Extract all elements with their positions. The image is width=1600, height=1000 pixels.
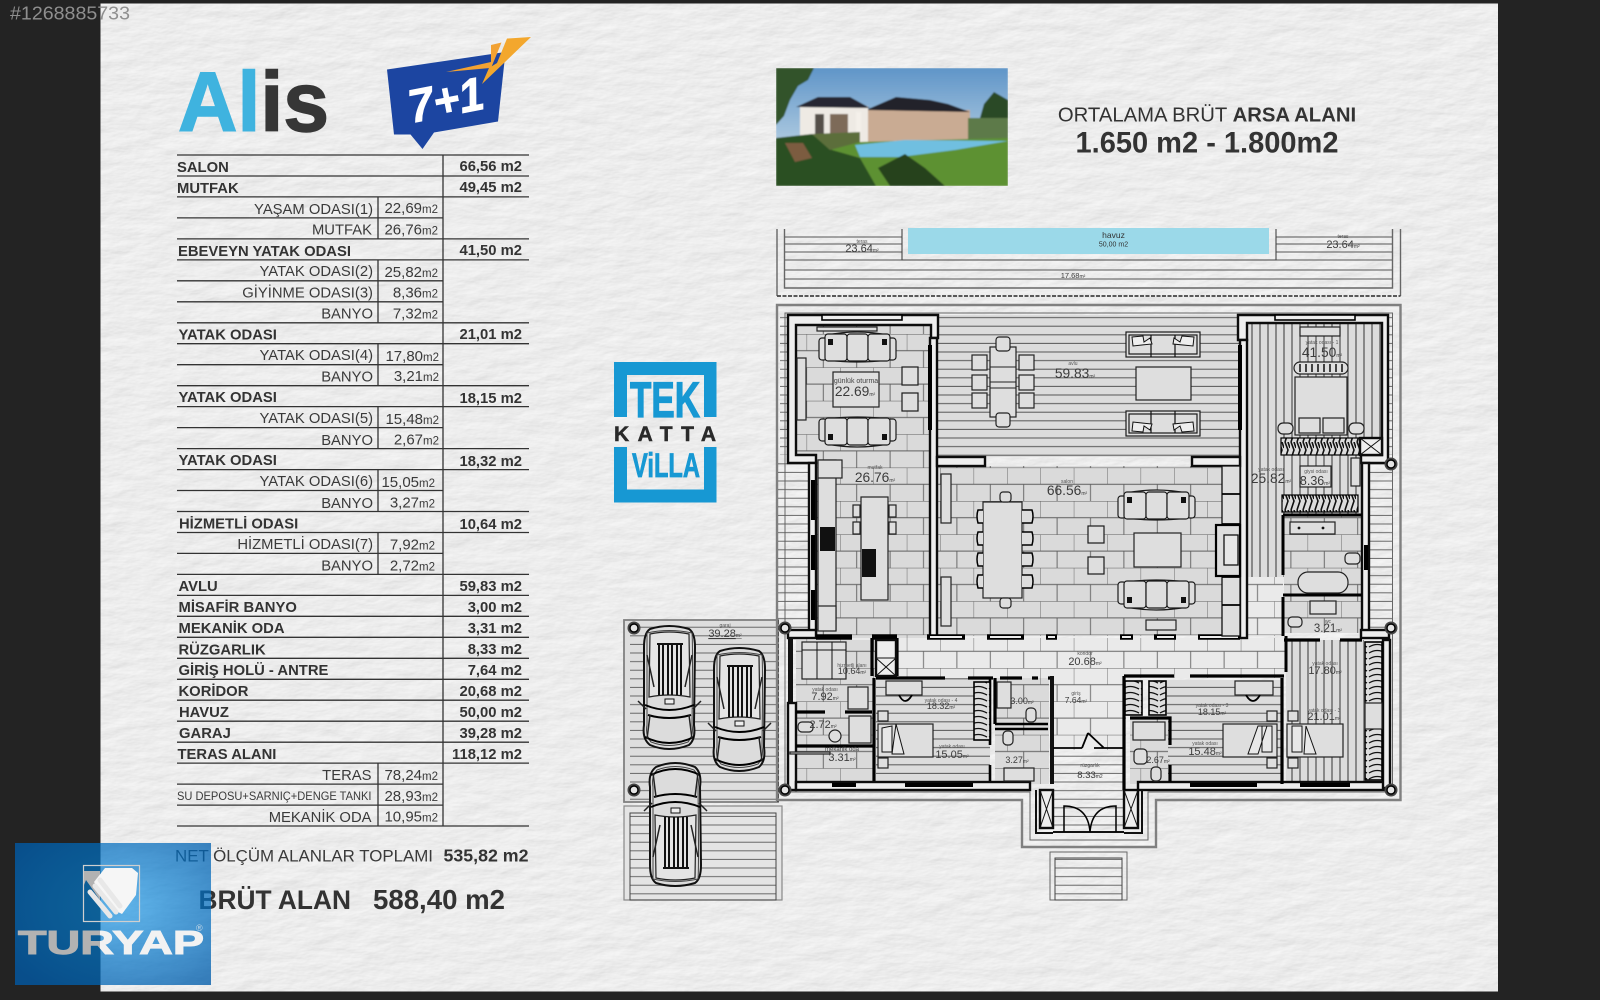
- label: pool: 50,00 m2: [1099, 242, 1128, 249]
- label: bedroom 18.32: 18.32m²: [927, 701, 956, 711]
- label: terrace right: 23.64m²: [1326, 239, 1360, 251]
- label: garage: 39.28m²: [708, 628, 742, 640]
- panel: master suite furniture: [1278, 327, 1382, 627]
- label: family room: [834, 378, 878, 399]
- wall: entry boxes: [1040, 790, 1053, 828]
- label: service bedroom: 7.92m²: [811, 691, 839, 703]
- row: banyo 2,67: [321, 432, 439, 449]
- wall: entry boxes right: [1124, 790, 1138, 828]
- label: service room: hizmetli alanı: [837, 663, 867, 669]
- label: service bedroom: yatak odası: [812, 687, 838, 693]
- row: avlu: AVLU: [178, 579, 218, 595]
- row: su deposu: [177, 788, 438, 805]
- label: service room: 10.64m²: [838, 666, 867, 676]
- row: mutfak: [177, 180, 522, 197]
- row: salon: 66,56 m2: [459, 159, 522, 175]
- row: mutfak sub: 26,76m2: [384, 222, 438, 238]
- floor plan: [624, 228, 1400, 900]
- registered mark: ®: [196, 923, 203, 933]
- icon: column bottom left: [778, 784, 792, 796]
- floor: guest bath: [995, 678, 1049, 784]
- row: salon: SALON: [177, 160, 229, 176]
- table grid lines: [177, 155, 529, 826]
- label: bath 2.67: 2.67m²: [1146, 755, 1170, 765]
- badge: 7+1 speech bubble: 7+1: [404, 66, 488, 133]
- panel: courtyard furniture: [972, 332, 1200, 436]
- label: garage: garaj: [719, 623, 731, 629]
- row: misafir banyo: MİSAFİR BANYO: [178, 599, 297, 616]
- label: bedroom 18.32: [925, 698, 958, 711]
- panel: right bedrooms furniture: [1125, 642, 1382, 781]
- icon: column bottom right: [1384, 784, 1398, 796]
- row: yatak odası 4: 17,80m2: [385, 348, 439, 365]
- label: garage: [708, 623, 742, 640]
- row: banyo 7,32: [321, 306, 438, 322]
- row: rüzgarlık: 8,33 m2: [468, 642, 522, 658]
- panel: floors: [796, 315, 1382, 832]
- row: yatak odası 18,32: 18,32 m2: [459, 454, 522, 470]
- panel: outer terrace border: [777, 305, 1400, 847]
- row: giyinme odası: 8,36m2: [393, 284, 438, 302]
- panel: rear terrace and pool: [777, 228, 1400, 296]
- floor: family room: [796, 325, 932, 458]
- label: guest bath: 3.00m²: [1010, 696, 1034, 706]
- row: banyo 2,67: 2,67m2: [394, 432, 439, 448]
- label: living room: salon: [1061, 479, 1073, 485]
- wall: lower service partitions: [796, 638, 1053, 784]
- row: garaj: [179, 726, 522, 742]
- label: bedroom 21.01: 21.01m²: [1307, 711, 1341, 723]
- wall: mech closet: [876, 640, 896, 676]
- row: yaşam odası: YAŞAM ODASI(1): [254, 202, 373, 218]
- logo: Tek Katta Villa: ViLLA: [632, 447, 700, 485]
- panel: front steps: [1050, 852, 1127, 900]
- row: teras alanı: [178, 747, 522, 763]
- row: garaj: 39,28 m2: [459, 726, 522, 742]
- row: yatak odası 2: [260, 264, 438, 281]
- logo: Tek Katta Villa: KATTA: [614, 423, 716, 446]
- row: banyo 7,32: 7,32m2: [393, 306, 438, 322]
- label: terrace left: teras: [856, 239, 868, 245]
- label: bedroom 15.48: yatak odası: [1192, 741, 1218, 747]
- row: rüzgarlık: [178, 642, 522, 658]
- label: wc 3.21: 3.21m²: [1314, 623, 1342, 635]
- row: hizmetli odası 7: HİZMETLİ ODASI(7): [237, 535, 373, 553]
- label: kitchen: 26.76m²: [855, 470, 896, 485]
- label: terrace right: [1326, 234, 1360, 251]
- row: yatak odası 18,15: YATAK ODASI: [178, 390, 277, 406]
- panel: garage: [624, 620, 782, 900]
- heading: average plot area: ORTALAMA BRÜT ARSA ALANI: [1058, 104, 1356, 126]
- row: banyo 3,21: BANYO: [321, 370, 373, 386]
- label: terrace right: teras: [1337, 234, 1349, 240]
- label: windbreak: 8.33m2: [1077, 770, 1103, 781]
- totals: gross area: 588,40 m2: [373, 884, 505, 915]
- label: bedroom 15.05: 15.05m²: [935, 749, 969, 761]
- listing id watermark: #1268885733: [10, 2, 130, 24]
- wall: right block: [1124, 640, 1362, 790]
- floor: bath right: [1130, 718, 1168, 784]
- row: hizmetli odası: HİZMETLİ ODASI: [179, 516, 298, 532]
- label: courtyard: 59.83m²: [1055, 366, 1096, 381]
- row: koridor: KORİDOR: [178, 683, 249, 700]
- row: hizmetli odası: [179, 516, 522, 533]
- label: bedroom 18.15: [1196, 703, 1229, 717]
- label: corridor: 20.68m²: [1068, 656, 1102, 668]
- floor: bedroom far right: [1286, 640, 1364, 784]
- pool: [908, 228, 1269, 254]
- row: yatak odası 5: YATAK ODASI(5): [260, 411, 373, 427]
- row: banyo 2,72: BANYO: [321, 558, 373, 574]
- wall: master room shell: [1238, 315, 1388, 463]
- row: ebeveyn yatak odası: EBEVEYN YATAK ODASI: [178, 244, 351, 260]
- row: yatak odası 21,01: 21,01 m2: [459, 327, 522, 343]
- panel: room labels: [809, 340, 1343, 781]
- floor: entrance hall: [1050, 678, 1126, 750]
- row: yatak odası 4: [260, 348, 439, 365]
- floor: living room: [937, 466, 1240, 636]
- label: mechanical room: 3.31m²: [828, 752, 856, 764]
- row: yatak odası 5: 15,48m2: [385, 411, 439, 428]
- row: banyo 2,72: [321, 558, 435, 574]
- row: mekanik oda: MEKANİK ODA: [178, 620, 285, 637]
- row: mutfak: 49,45 m2: [459, 180, 522, 196]
- label: courtyard: avlu: [1068, 361, 1078, 367]
- label: master bedroom corridor: 25.82m²: [1251, 471, 1292, 486]
- row: teras: TERAS: [322, 768, 372, 784]
- totals: net area: [175, 846, 529, 866]
- row: rüzgarlık: RÜZGARLIK: [178, 642, 266, 658]
- label: pool: havuz: [1102, 230, 1125, 240]
- row: mekanik oda sub: [269, 808, 438, 826]
- label: bedroom 15.48: 15.48m²: [1188, 746, 1222, 758]
- floor: master bedroom: [1247, 323, 1382, 455]
- row: avlu: [178, 579, 522, 595]
- row: ebeveyn yatak odası: 41,50 m2: [459, 243, 522, 259]
- label: corridor: koridor: [1077, 651, 1093, 657]
- icon: garage column lower: [628, 784, 640, 796]
- wall: left service: [788, 638, 793, 703]
- row: mekanik oda sub: 10,95m2: [384, 808, 438, 826]
- row: hizmetli odası: 10,64 m2: [459, 517, 522, 533]
- icon: handshake: [84, 866, 140, 922]
- label: terrace left: 23.64m²: [845, 243, 879, 255]
- floor: service room: [796, 640, 874, 786]
- wall: master interior: [1240, 340, 1247, 638]
- row: yatak odası 6: YATAK ODASI(6): [260, 474, 373, 490]
- row: yatak odası 6: 15,05m2: [381, 474, 435, 491]
- logo: Tek Katta Villa: [614, 362, 716, 502]
- heading: average plot area: [1058, 104, 1356, 160]
- title: Alis: Alis: [178, 55, 329, 149]
- row: mutfak sub: MUTFAK: [312, 222, 372, 238]
- label: family room: günlük oturma: [834, 378, 878, 385]
- row: teras alanı: TERAS ALANI: [178, 747, 276, 763]
- row: giyinme odası: [242, 284, 438, 302]
- label: mechanical room: [825, 747, 860, 764]
- label: dressing room: 8.36m²: [1300, 474, 1330, 488]
- label: bedroom 18.32: yatak odası - 4: [925, 698, 958, 704]
- row: teras alanı: 118,12 m2: [452, 747, 522, 763]
- totals: gross area: BRÜT ALAN: [198, 885, 351, 915]
- row: banyo 2,67: BANYO: [321, 433, 373, 449]
- label: bedroom 15.05: yatak odası: [939, 744, 965, 750]
- row: ebeveyn yatak odası: [178, 243, 522, 260]
- row: yatak odası 2: 25,82m2: [384, 264, 438, 281]
- icon: column upper right: [1384, 458, 1398, 470]
- row: giriş holü: 7,64 m2: [468, 663, 522, 679]
- label: entrance hall: 7.64m²: [1065, 695, 1088, 705]
- row: yatak odası 18,15: [178, 390, 522, 407]
- row: yatak odası 6: [260, 474, 435, 491]
- label: bedroom 18.15: 18.15m²: [1198, 707, 1227, 717]
- row: banyo 3,21: [321, 368, 439, 386]
- row: misafir banyo: [178, 599, 522, 616]
- row: koridor: 20,68 m2: [459, 684, 522, 700]
- window: master: [1275, 315, 1355, 320]
- floor: hall beside master: [1247, 577, 1283, 636]
- label: service bath: 2.72m²: [809, 719, 837, 731]
- label: dressing room: giysi odası: [1304, 469, 1328, 475]
- label: living room: 66.56m²: [1047, 483, 1088, 498]
- row: salon: [177, 159, 522, 176]
- floor: courtyard: [937, 315, 1240, 457]
- label: mechanical room: mekanik oda: [825, 747, 860, 753]
- icon: car 2: [708, 648, 771, 771]
- row: yatak odası 5: [260, 411, 439, 428]
- label: terrace middle: 17.68m²: [1061, 271, 1086, 280]
- floor: corridor: [796, 638, 1288, 678]
- label: bedroom 18.15: yatak odası - 3: [1196, 703, 1229, 709]
- panel: left bedroom furniture: [878, 681, 1036, 781]
- wall: bottom façade: [796, 782, 1030, 790]
- row: banyo 3,21: 3,21m2: [394, 368, 439, 385]
- label: bedroom 15.05: [935, 744, 969, 761]
- row: koridor: [178, 683, 522, 700]
- icon: entrance doors and swing door: [1053, 733, 1124, 832]
- row: mekanik oda: 3,31 m2: [468, 621, 522, 637]
- wall: central: [930, 338, 937, 638]
- row: mutfak: MUTFAK: [177, 181, 239, 197]
- floor: dressing and master corridor: [1247, 455, 1362, 577]
- row: banyo 2,72: 2,72m2: [390, 558, 435, 574]
- label: bedroom 17.80: 17.80m²: [1308, 665, 1342, 677]
- row: giyinme odası: GİYİNME ODASI(3): [242, 284, 373, 302]
- row: yaşam odası: [254, 200, 438, 218]
- label: windbreak: [1077, 763, 1103, 781]
- row: teras: [322, 767, 438, 784]
- panel: kitchen furniture: [818, 460, 896, 631]
- row: yatak odası 18,32: YATAK ODASI: [178, 453, 277, 469]
- floor: kitchen: [815, 455, 932, 638]
- row: banyo 7,32: BANYO: [321, 306, 373, 322]
- row: giriş holü: GİRİŞ HOLÜ - ANTRE: [178, 662, 329, 679]
- panel: family room furniture: [797, 327, 918, 447]
- totals: net area: NET ÖLÇÜM ALANLAR TOPLAMI: [175, 846, 433, 866]
- icon: column left: [778, 622, 792, 634]
- floor: bedroom right: [1167, 680, 1282, 784]
- logo wordmark: TURYAP: [18, 924, 204, 961]
- row: giriş holü: [178, 662, 522, 679]
- label: wc 3.21: wc: [1325, 619, 1332, 625]
- row: yatak odası 2: YATAK ODASI(2): [260, 264, 373, 280]
- panel: walls: [778, 315, 1398, 833]
- label: bedroom 17.80: yatak odası: [1312, 661, 1338, 667]
- row: mutfak sub: [312, 222, 438, 238]
- row: hizmetli odası 7: [237, 535, 435, 554]
- row: banyo 3,27: BANYO: [321, 496, 373, 512]
- row: yatak odası 4: YATAK ODASI(4): [260, 348, 373, 364]
- row: yaşam odası: 22,69m2: [384, 200, 438, 217]
- label: master bedroom corridor: yatak odası: [1258, 467, 1284, 473]
- label: bedroom 21.01: yatak odası - 3: [1308, 708, 1341, 714]
- label: family room: 22.69m²: [835, 384, 876, 399]
- label: windbreak: rüzgarlık: [1080, 763, 1100, 769]
- badge: 7+1 speech bubble: [387, 37, 531, 149]
- label: master bedroom: 41.50m²: [1302, 345, 1343, 360]
- label: master bedroom: yatak odası - 1: [1306, 340, 1339, 346]
- icon: car 3: [644, 763, 707, 886]
- row: yatak odası 21,01: [178, 327, 522, 344]
- panel: living room furniture: [941, 466, 1240, 636]
- label: bath 3.27: 3.27m²: [1005, 755, 1029, 765]
- icon: garage column: [628, 622, 640, 634]
- logo: Turyap overlay: [15, 843, 211, 985]
- icon: column lower right: [1384, 622, 1398, 634]
- row: yatak odası 18,32: [178, 453, 522, 470]
- icon: car 1: [638, 626, 701, 749]
- label: corridor: [1068, 651, 1102, 668]
- wall: kitchen exterior: [809, 463, 816, 635]
- row: teras: 78,24m2: [384, 767, 438, 784]
- label: bedroom 15.48: [1188, 741, 1222, 758]
- row: misafir banyo: 3,00 m2: [468, 600, 522, 616]
- row: mekanik oda: [178, 620, 522, 637]
- logo: Tek Katta Villa: TEK: [630, 372, 700, 428]
- row: mekanik oda sub: MEKANİK ODA: [269, 808, 372, 826]
- row: yatak odası 18,15: 18,15 m2: [459, 391, 522, 407]
- window: family room: [822, 315, 902, 320]
- wall: family room shell: [788, 315, 938, 463]
- label: entrance hall: giriş: [1071, 691, 1081, 697]
- wall: corridor line segments: [816, 634, 1240, 640]
- totals: gross area: [198, 884, 505, 915]
- wall: master exterior lower: [1362, 463, 1369, 635]
- panel: service wing furniture: [790, 642, 871, 754]
- row: hizmetli odası 7: 7,92m2: [390, 536, 435, 554]
- row: havuz: [179, 705, 522, 721]
- photo: villa with pool: [776, 68, 1008, 186]
- row: su deposu: 28,93m2: [384, 788, 438, 805]
- row: banyo 3,27: [321, 494, 435, 512]
- floor: bedroom left: [876, 678, 990, 784]
- row: garaj: GARAJ: [179, 726, 231, 742]
- floor: master bath: [1284, 515, 1362, 633]
- row: avlu: 59,83 m2: [459, 579, 522, 595]
- totals: net area: 535,82 m2: [444, 846, 529, 866]
- row: havuz: 50,00 m2: [459, 705, 522, 721]
- table: room areas: [177, 155, 529, 826]
- row: yatak odası 21,01: YATAK ODASI: [178, 328, 277, 344]
- floor: windbreak: [1053, 750, 1124, 832]
- heading: average plot area: 1.650 m2 - 1.800m2: [1076, 126, 1338, 160]
- row: havuz: HAVUZ: [179, 705, 229, 721]
- label: kitchen: mutfak: [867, 465, 883, 471]
- row: su deposu: SU DEPOSU+SARNIÇ+DENGE TANKI: [177, 789, 372, 803]
- row: banyo 3,27: 3,27m2: [390, 494, 435, 512]
- label: pool: [1099, 230, 1128, 249]
